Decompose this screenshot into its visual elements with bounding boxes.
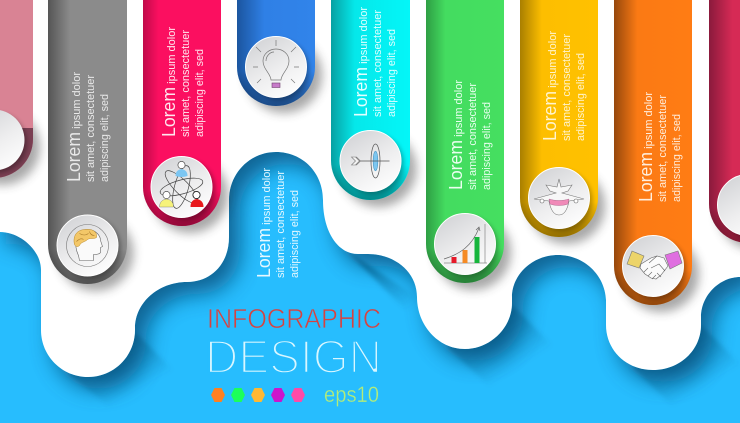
text: gray bar: [64, 72, 111, 182]
text: cyan bar: sit amet, consectetuer: [372, 10, 384, 117]
shadows on blue background: [0, 152, 740, 404]
panel: cyan bar: [331, 0, 410, 200]
icon: growth chart: [434, 214, 496, 274]
panel: green bar: [426, 0, 504, 283]
colored hexagon dots: [211, 388, 305, 402]
icon: light bulb: [246, 36, 306, 98]
panel: rose bar: [143, 0, 221, 226]
text: rose bar: [159, 27, 206, 137]
text: gray bar: adipiscing elit, sed: [99, 94, 111, 182]
panel: yellow bar: [520, 0, 598, 237]
text: center bump: Lorem ipsum dolor: [254, 168, 274, 278]
text: yellow bar: Lorem ipsum dolor: [540, 31, 560, 141]
icon: arrow and target: [340, 130, 401, 192]
title: INFOGRAPHIC: INFOGRAPHIC: [207, 303, 381, 334]
text: rose bar: sit amet, consectetuer: [180, 30, 192, 137]
text: gray bar: Lorem ipsum dolor: [64, 72, 84, 182]
text: green bar: sit amet, consectetuer: [467, 83, 479, 190]
panel: blue bar: [237, 0, 315, 106]
text: yellow bar: sit amet, consectetuer: [561, 34, 573, 141]
bar end shadows: [0, 37, 740, 312]
text: cyan bar: [351, 7, 398, 117]
title: DESIGN: DESIGN: [205, 330, 382, 383]
text: orange bar: sit amet, consectetuer: [657, 95, 669, 202]
text: green bar: Lorem ipsum dolor: [446, 80, 466, 190]
panel: faded pink bar: [0, 0, 33, 178]
label: eps10: eps10: [324, 382, 379, 407]
icon: handshake: [622, 236, 684, 296]
text: center bump: [254, 168, 301, 278]
text: yellow bar: [540, 31, 587, 141]
icon: brain in head: [57, 215, 118, 276]
text: cyan bar: Lorem ipsum dolor: [351, 7, 371, 117]
text: yellow bar: adipiscing elit, sed: [575, 53, 587, 141]
icon: disc cut off at edge: [718, 174, 740, 236]
text: orange bar: [636, 92, 683, 202]
text: rose bar: adipiscing elit, sed: [194, 49, 206, 137]
text: gray bar: sit amet, consectetuer: [85, 75, 97, 182]
text: center bump: sit amet, consectetuer: [275, 171, 287, 278]
text: green bar: adipiscing elit, sed: [481, 102, 493, 190]
icon: atom with people: [151, 156, 212, 218]
panel: crimson bar: [709, 0, 740, 243]
text: orange bar: Lorem ipsum dolor: [636, 92, 656, 202]
icon: airplane front view: [528, 168, 590, 228]
text: green bar: [446, 80, 493, 190]
text: cyan bar: adipiscing elit, sed: [386, 29, 398, 117]
text: orange bar: adipiscing elit, sed: [671, 114, 683, 202]
text: center bump: adipiscing elit, sed: [289, 190, 301, 278]
panel: orange bar: [614, 0, 692, 305]
panel: gray bar: [48, 0, 127, 284]
text: rose bar: Lorem ipsum dolor: [159, 27, 179, 137]
